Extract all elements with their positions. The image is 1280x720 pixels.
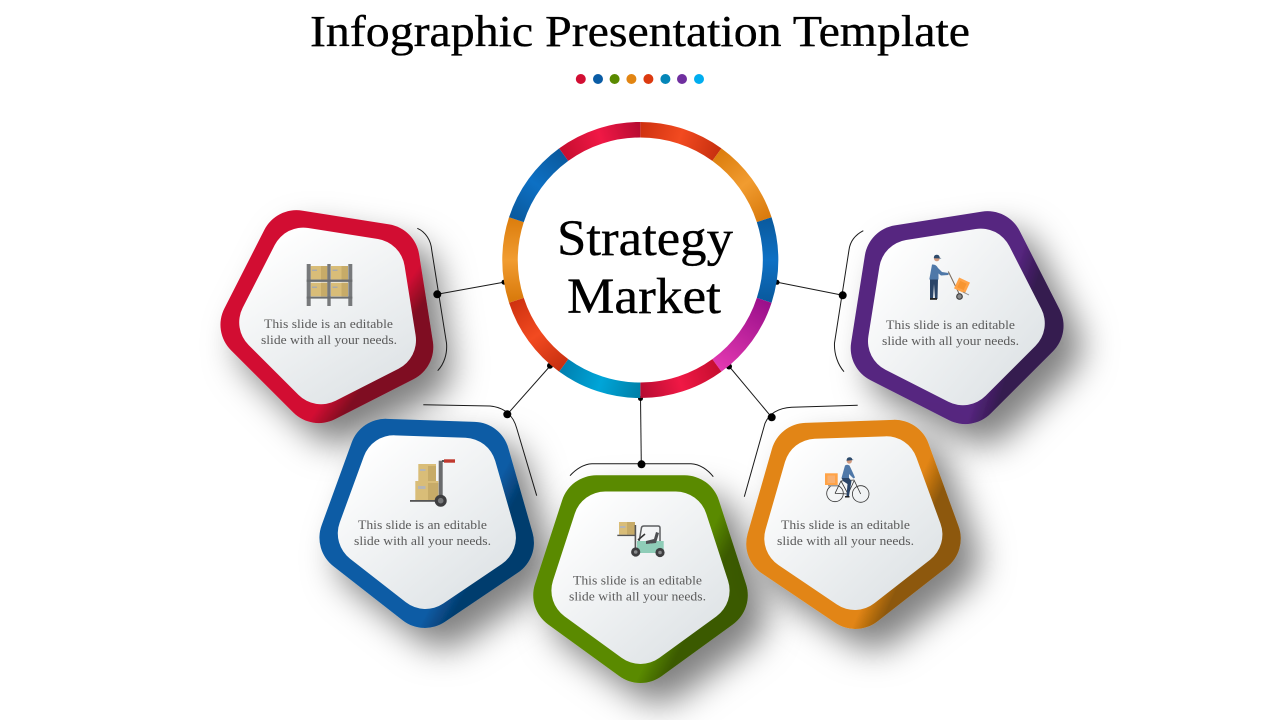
icon: worker pushing cart — [929, 255, 970, 300]
connector: bracket and line to green pentagon — [570, 396, 713, 477]
text: red panel: slide with all your needs. — [261, 333, 397, 347]
central ring — [510, 130, 771, 390]
text: blue panel — [354, 518, 491, 548]
panel: orange pentagon — [779, 455, 927, 595]
title: Infographic Presentation Template — [310, 7, 970, 56]
text: green panel: slide with all your needs. — [569, 590, 706, 604]
text: red panel — [261, 317, 397, 347]
text: purple panel — [882, 318, 1019, 348]
panel: red pentagon — [248, 242, 410, 398]
text: orange panel — [777, 518, 914, 548]
ring centre heading — [557, 211, 734, 325]
icon: delivery cyclist — [825, 457, 869, 502]
panel: purple pentagon — [874, 243, 1036, 399]
text: orange panel: slide with all your needs. — [777, 534, 914, 548]
ring centre heading: Strategy — [557, 211, 734, 267]
text: orange panel: This slide is an editable — [781, 518, 911, 532]
icon: forklift with box — [617, 522, 665, 557]
connector: right bracket and line to purple pentagon — [774, 231, 863, 372]
connector: left bracket and line to red pentagon — [417, 228, 506, 371]
text: purple panel: slide with all your needs. — [882, 334, 1019, 348]
text: purple panel: This slide is an editable — [886, 318, 1016, 332]
text: red panel: This slide is an editable — [264, 317, 394, 331]
connector: bracket and line to orange pentagon — [726, 364, 858, 497]
text: green panel — [569, 574, 706, 604]
connector: bracket and line to blue pentagon — [423, 363, 553, 496]
ring centre heading: Market — [567, 269, 721, 325]
icon: warehouse shelves with boxes — [307, 264, 352, 306]
decorative colour dots row — [576, 74, 704, 84]
panel: blue pentagon — [354, 454, 501, 594]
panel: green pentagon — [569, 511, 712, 647]
text: blue panel: This slide is an editable — [358, 518, 488, 532]
icon: hand truck with boxes — [410, 459, 455, 507]
text: green panel: This slide is an editable — [573, 574, 703, 588]
text: blue panel: slide with all your needs. — [354, 534, 491, 548]
